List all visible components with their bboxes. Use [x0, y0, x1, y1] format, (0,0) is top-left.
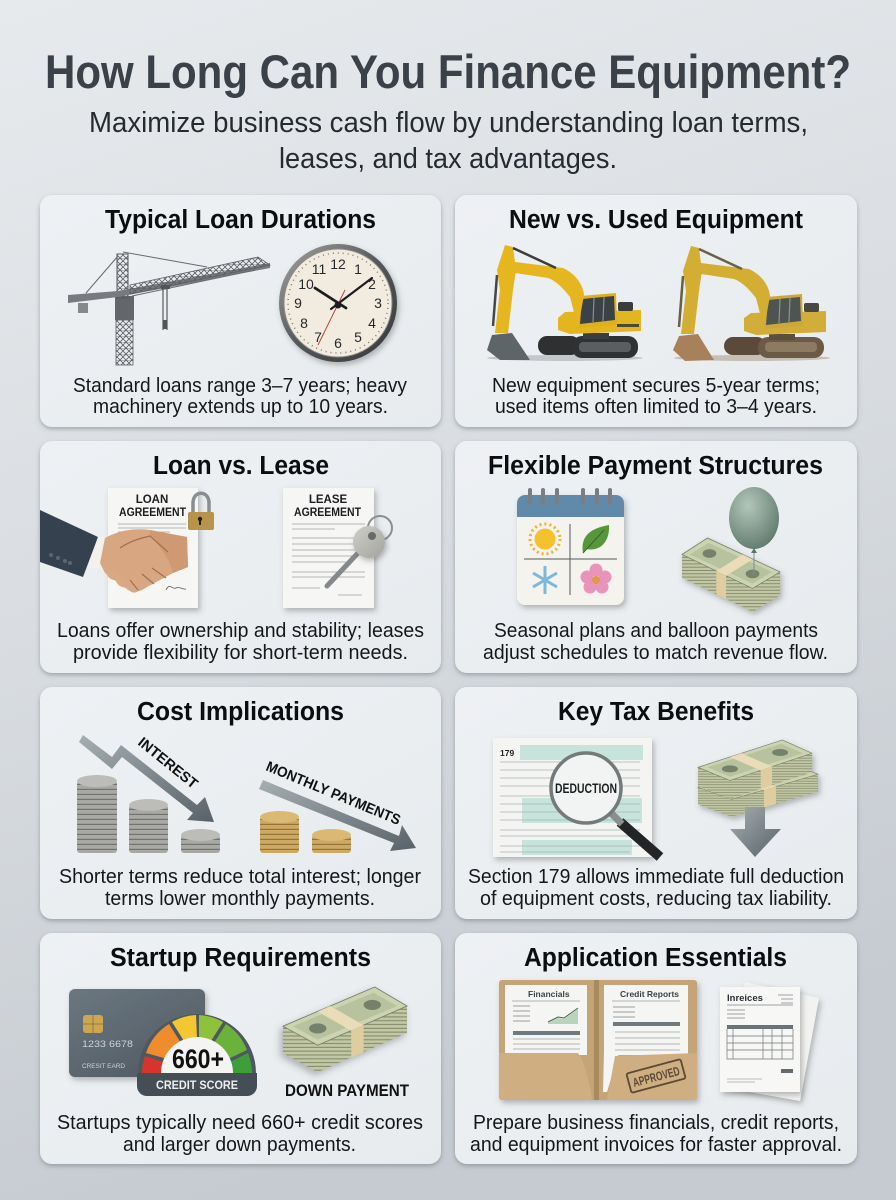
panel: cost implications: [40, 687, 441, 919]
description: Standard loans range 3–7 years; heavy: [73, 375, 407, 397]
icon: tower crane: [68, 252, 270, 365]
description: provide flexibility for short-term needs.: [73, 642, 408, 664]
silver coin stacks: [77, 775, 220, 853]
icon: seasonal calendar: [517, 490, 624, 605]
subtitle: Maximize business cash flow by understanding loan terms,: [89, 107, 808, 139]
icon: section 179 tax form: 179: [500, 748, 514, 758]
icon: loan agreement document: LOAN: [136, 494, 168, 506]
description: Shorter terms reduce total interest; longer: [59, 866, 421, 888]
heading: typical loan durations: Typical Loan Durations: [105, 206, 376, 234]
description: [59, 866, 421, 910]
description: adjust schedules to match revenue flow.: [483, 642, 828, 664]
icon: magnifying glass: [551, 753, 660, 857]
description: [492, 375, 820, 418]
icon: section 179 tax form: [493, 738, 652, 857]
icon: wall clock: 5: [354, 329, 362, 345]
subtitle: [89, 107, 808, 175]
panel: loan vs lease: [40, 441, 441, 673]
heading: flexible payment structures: Flexible Payment Structures: [488, 452, 823, 480]
description: [470, 1112, 842, 1156]
icon: credit score gauge: 660+: [172, 1044, 224, 1074]
icon: wall clock: 3: [374, 295, 382, 311]
subtitle: leases, and tax advantages.: [279, 143, 617, 175]
arrow: interest falling: [79, 735, 214, 822]
heading: startup requirements: Startup Requirements: [110, 944, 371, 972]
icon: key: [327, 516, 392, 586]
icon: loan agreement document: [108, 488, 198, 608]
description: Prepare business financials, credit reports,: [473, 1112, 839, 1134]
panel: key tax benefits: [455, 687, 857, 919]
panel: new vs used equipment: [455, 195, 857, 427]
icon: wall clock: 12: [330, 256, 346, 272]
icon: credit score gauge: [137, 1014, 257, 1096]
description: and equipment invoices for faster approval.: [470, 1134, 842, 1156]
icon: used excavator: [673, 246, 830, 361]
icon: credit card: 1233 6678: [82, 1039, 133, 1050]
panel: typical loan durations: [40, 195, 441, 427]
panel: application essentials: [455, 933, 857, 1164]
description: [57, 1112, 423, 1156]
icon: stacked cash: [698, 740, 818, 817]
gold coin stacks: [260, 811, 351, 853]
description: New equipment secures 5-year terms;: [492, 375, 820, 397]
icon: lease agreement document: LEASE: [309, 494, 347, 506]
icon: wall clock: 4: [368, 315, 376, 331]
icon: padlock: [188, 493, 214, 530]
icon: magnifying glass: DEDUCTION: [555, 781, 617, 796]
description: Seasonal plans and balloon payments: [494, 620, 818, 642]
icon: wall clock: [279, 244, 397, 362]
icon: wall clock: 1: [354, 261, 362, 277]
arrow: monthly payments falling: MONTHLY PAYMENTS: [263, 759, 403, 829]
arrow: interest falling: INTEREST: [134, 735, 201, 793]
description: [57, 620, 424, 664]
description: and larger down payments.: [123, 1134, 356, 1156]
label: down payment: DOWN PAYMENT: [285, 1081, 410, 1100]
icon: wall clock: 7: [314, 329, 322, 345]
icon: credit card: CRESIT EARD: [82, 1063, 125, 1070]
heading: key tax benefits: Key Tax Benefits: [558, 698, 754, 726]
icon: wall clock: 8: [300, 315, 308, 331]
icon: wall clock: 9: [294, 295, 302, 311]
icon: lease agreement document: AGREEMENT: [294, 507, 361, 519]
description: of equipment costs, reducing tax liability.: [480, 888, 832, 910]
icon: wall clock: 2: [368, 276, 376, 292]
description: terms lower monthly payments.: [105, 888, 375, 910]
heading: loan vs lease: Loan vs. Lease: [153, 452, 329, 480]
panel: flexible payment structures: [455, 441, 857, 673]
icon: credit score gauge: CREDIT SCORE: [156, 1078, 238, 1092]
description: [483, 620, 828, 664]
icon: lease agreement document: [283, 488, 374, 608]
icon: cash down payment: [283, 987, 410, 1100]
description: machinery extends up to 10 years.: [93, 396, 388, 418]
icon: cash with balloon: [682, 487, 780, 612]
description: Loans offer ownership and stability; leases: [57, 620, 424, 642]
icon: new excavator: [487, 245, 643, 361]
icon: invoices: Inreices: [727, 993, 763, 1004]
description: [73, 375, 407, 418]
arrow: down: [730, 807, 781, 857]
icon: folder with documents: APPROVED: [631, 1064, 681, 1090]
heading: cost implications: Cost Implications: [137, 698, 344, 726]
description: [468, 866, 844, 910]
icon: wall clock: 6: [334, 335, 342, 351]
description: used items often limited to 3–4 years.: [495, 396, 817, 418]
heading: application essentials: Application Essentials: [524, 944, 787, 972]
panel: startup requirements: [40, 933, 441, 1164]
icon: credit card: [69, 989, 205, 1077]
icon: folder with documents: Credit Reports: [620, 989, 679, 999]
icon: wall clock: 11: [312, 261, 326, 277]
icon: folder with documents: Financials: [528, 989, 570, 999]
icon: invoices: [720, 982, 819, 1101]
description: Startups typically need 660+ credit scores: [57, 1112, 423, 1134]
icon: handshake: [40, 510, 188, 595]
description: Section 179 allows immediate full deduction: [468, 866, 844, 888]
icon: loan agreement document: AGREEMENT: [119, 507, 186, 519]
icon: wall clock: 10: [298, 276, 314, 292]
icon: folder with documents: [499, 980, 697, 1100]
heading: new vs used: New vs. Used Equipment: [509, 206, 803, 234]
